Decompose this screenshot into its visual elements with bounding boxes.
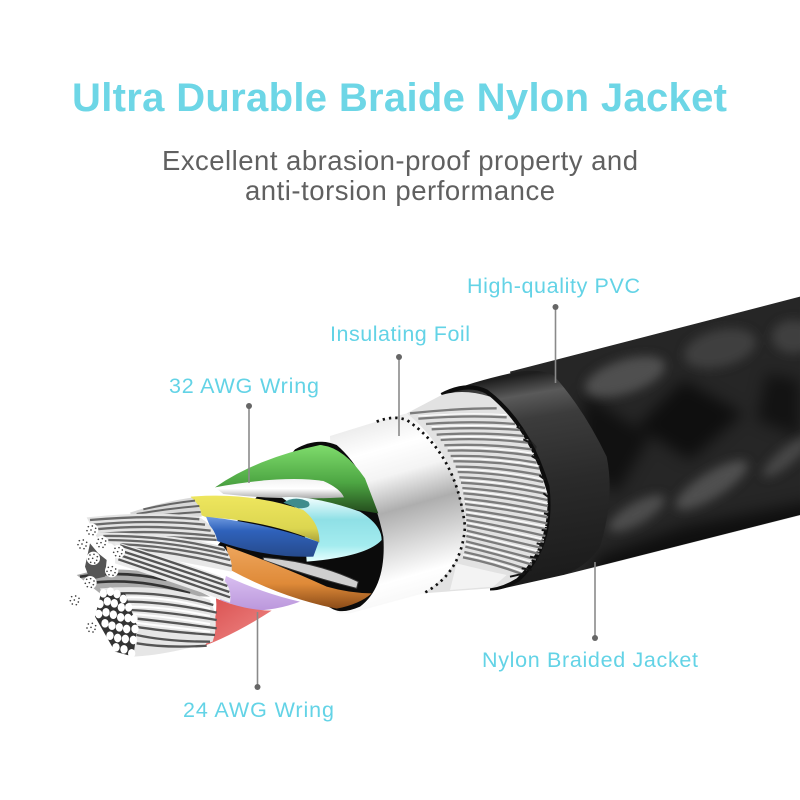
strand bundle D xyxy=(100,587,217,657)
yellow wire xyxy=(191,496,319,542)
blue wire xyxy=(206,517,319,557)
strand bundle C xyxy=(115,542,230,603)
red wire xyxy=(205,598,272,646)
subtitle xyxy=(162,145,638,206)
callout: 32 AWG Wring: 32 AWG Wring xyxy=(169,374,319,398)
callout: Nylon Braided Jacket xyxy=(482,562,698,672)
cyan wire xyxy=(282,497,382,562)
callout: 32 AWG Wring xyxy=(169,374,319,483)
orange wire xyxy=(226,546,372,609)
high-quality PVC band xyxy=(442,371,610,588)
cyan wire inner shadow xyxy=(283,499,310,508)
copper braid shield xyxy=(407,392,549,593)
subtitle: Excellent abrasion-proof property and xyxy=(162,145,638,176)
dark inner rim of PVC band xyxy=(442,387,548,588)
callout: High-quality PVC: High-quality PVC xyxy=(467,274,640,298)
strand bundle A xyxy=(87,514,217,543)
insulating foil xyxy=(330,413,466,613)
callout: High-quality PVC xyxy=(467,274,640,383)
purple wire xyxy=(220,576,300,611)
nylon braided jacket xyxy=(510,296,800,575)
cable illustration: outer layers xyxy=(330,297,800,613)
title: Ultra Durable Braide Nylon Jacket xyxy=(72,76,727,120)
cable opening xyxy=(217,442,384,611)
back strand bundle xyxy=(130,498,202,520)
strands behind orange wire xyxy=(263,557,358,588)
subtitle: anti-torsion performance xyxy=(245,175,555,206)
foil perforated edge xyxy=(377,418,465,593)
rear strand bundle xyxy=(77,570,210,597)
cable illustration: conductors xyxy=(68,442,384,658)
callout: Insulating Foil xyxy=(330,322,470,436)
large strand end xyxy=(95,587,139,658)
white wire xyxy=(215,479,344,498)
callout: Nylon Braided Jacket: Nylon Braided Jacket xyxy=(482,648,698,672)
callout: 24 AWG Wring xyxy=(183,612,334,722)
strand ends xyxy=(68,523,139,658)
callout: 24 AWG Wring: 24 AWG Wring xyxy=(183,698,334,722)
green wire xyxy=(215,445,378,513)
callout: Insulating Foil: Insulating Foil xyxy=(330,322,470,346)
strand bundle B xyxy=(97,533,232,572)
